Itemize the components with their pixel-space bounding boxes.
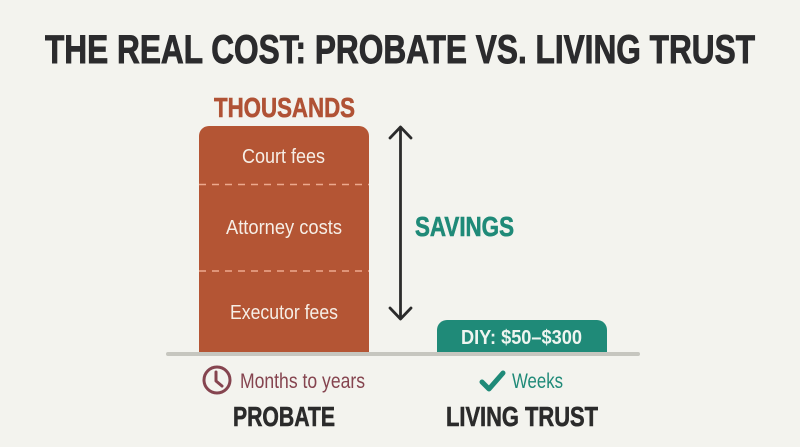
- bar label: DIY cost: DIY: $50–$300: [461, 326, 582, 349]
- segment: attorney costs: Attorney costs: [226, 216, 342, 239]
- living trust timeframe: [482, 370, 563, 393]
- probate timeframe: [204, 367, 365, 393]
- chart baseline: [166, 352, 640, 356]
- segment: executor fees: Executor fees: [230, 301, 338, 324]
- icon: clock: [204, 367, 230, 393]
- probate timeframe: Months to years: [240, 370, 365, 393]
- panel: living trust cost bar: [437, 320, 607, 353]
- column label: living trust: LIVING TRUST: [446, 401, 598, 432]
- icon: check mark: [482, 373, 503, 389]
- segment: court fees: Court fees: [242, 145, 325, 168]
- living trust timeframe: Weeks: [512, 370, 563, 393]
- savings label: SAVINGS: [415, 211, 514, 242]
- probate bar: [199, 126, 369, 353]
- column label: probate: PROBATE: [233, 401, 335, 432]
- bar label: thousands: THOUSANDS: [214, 92, 355, 123]
- arrow: savings range: [390, 127, 411, 319]
- panel: probate cost bar: [199, 92, 369, 353]
